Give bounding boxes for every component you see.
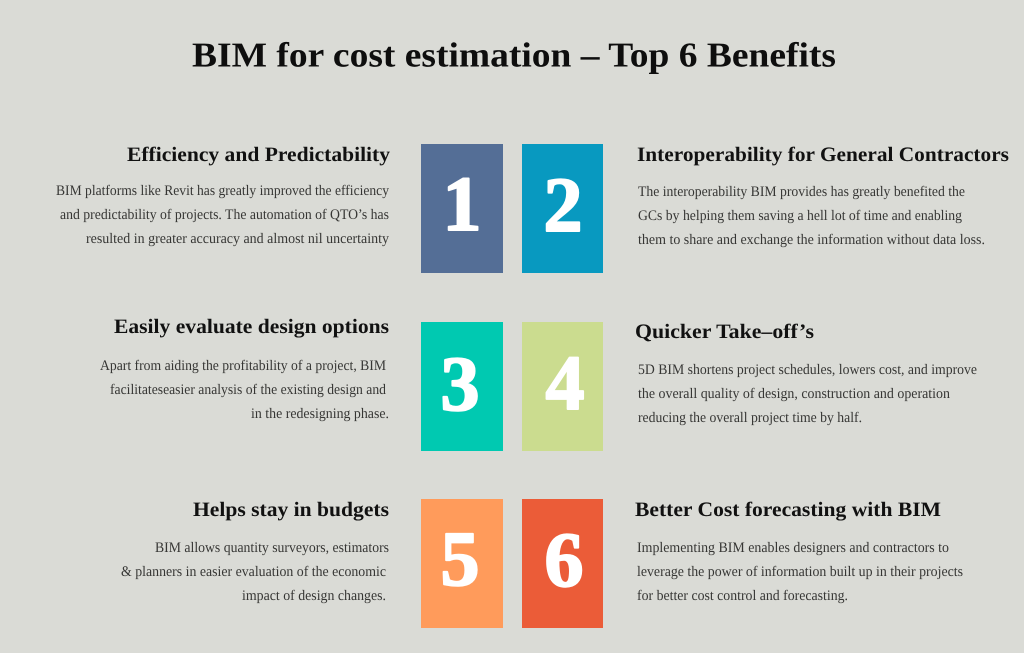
panel: quicker take-offs bbox=[635, 321, 977, 426]
number tile 5 bbox=[421, 499, 503, 628]
number tile 1: 1 bbox=[442, 160, 482, 247]
panel: better cost forecasting with bim bbox=[635, 499, 963, 604]
text block: efficiency and predictability: and predictability of projects. The automation of QTO’s has bbox=[60, 207, 389, 223]
text block: efficiency and predictability bbox=[56, 183, 390, 247]
panel: helps stay in budgets bbox=[121, 499, 389, 604]
text block: quicker take-offs: 5D BIM shortens project schedules, lowers cost, and improve bbox=[638, 362, 977, 378]
number tile 4 bbox=[522, 322, 603, 451]
heading: quicker take-offs: Quicker Take–off’s bbox=[635, 321, 814, 343]
title: BIM for cost estimation – Top 6 Benefits bbox=[192, 36, 836, 74]
text block: better cost forecasting: Implementing BIM enables designers and contractors to bbox=[637, 540, 949, 556]
number tile 3 bbox=[421, 322, 503, 451]
text block: helps stay in budgets bbox=[121, 540, 389, 604]
heading: helps stay in budgets: Helps stay in budgets bbox=[193, 499, 389, 521]
panel: easily evaluate design options bbox=[100, 316, 389, 422]
text block: easily evaluate design options: Apart from aiding the profitability of a project, BIM bbox=[100, 358, 386, 374]
text block: easily evaluate design options bbox=[100, 358, 389, 422]
text block: interoperability: them to share and exchange the information without data loss. bbox=[638, 232, 985, 248]
heading: easily evaluate design options: Easily evaluate design options bbox=[114, 316, 389, 338]
text block: better cost forecasting bbox=[637, 540, 963, 604]
text block: easily evaluate design options: facilitateseasier analysis of the existing design and bbox=[110, 382, 387, 398]
number tile 2 bbox=[522, 144, 603, 273]
text block: interoperability: GCs by helping them saving a hell lot of time and enabling bbox=[638, 208, 963, 224]
text block: quicker take-offs: reducing the overall project time by half. bbox=[638, 410, 862, 426]
number tile 6: 6 bbox=[544, 516, 584, 603]
heading: better cost forecasting: Better Cost forecasting with BIM bbox=[635, 499, 941, 521]
text block: helps stay in budgets: impact of design changes. bbox=[242, 588, 386, 604]
text block: better cost forecasting: leverage the power of information built up in their projects bbox=[637, 564, 963, 580]
number tile 1 bbox=[421, 144, 503, 273]
text block: efficiency and predictability: BIM platforms like Revit has greatly improved the efficiency bbox=[56, 183, 390, 199]
number tile 4: 4 bbox=[546, 339, 584, 426]
heading: interoperability: Interoperability for General Contractors bbox=[637, 144, 1009, 166]
panel: efficiency and predictability bbox=[56, 144, 391, 247]
heading: efficiency and predictability: Efficiency and Predictability bbox=[127, 144, 391, 166]
text block: interoperability: The interoperability BIM provides has greatly benefited the bbox=[638, 184, 965, 200]
text block: quicker take-offs: the overall quality of design, construction and operation bbox=[638, 386, 951, 402]
text block: better cost forecasting: for better cost control and forecasting. bbox=[637, 588, 848, 604]
number tile 6 bbox=[522, 499, 603, 628]
text block: easily evaluate design options: in the redesigning phase. bbox=[251, 406, 389, 422]
number tile 3: 3 bbox=[440, 340, 480, 427]
text block: helps stay in budgets: BIM allows quantity surveyors, estimators bbox=[155, 540, 389, 556]
text block: efficiency and predictability: resulted in greater accuracy and almost nil uncertainty bbox=[86, 231, 390, 247]
text block: interoperability bbox=[638, 184, 985, 248]
number tile 2: 2 bbox=[544, 161, 582, 248]
panel: interoperability for general contractors bbox=[637, 144, 1009, 248]
text block: quicker take-offs bbox=[638, 362, 977, 426]
number tile 5: 5 bbox=[440, 515, 480, 602]
text block: helps stay in budgets: & planners in easier evaluation of the economic bbox=[121, 564, 386, 580]
